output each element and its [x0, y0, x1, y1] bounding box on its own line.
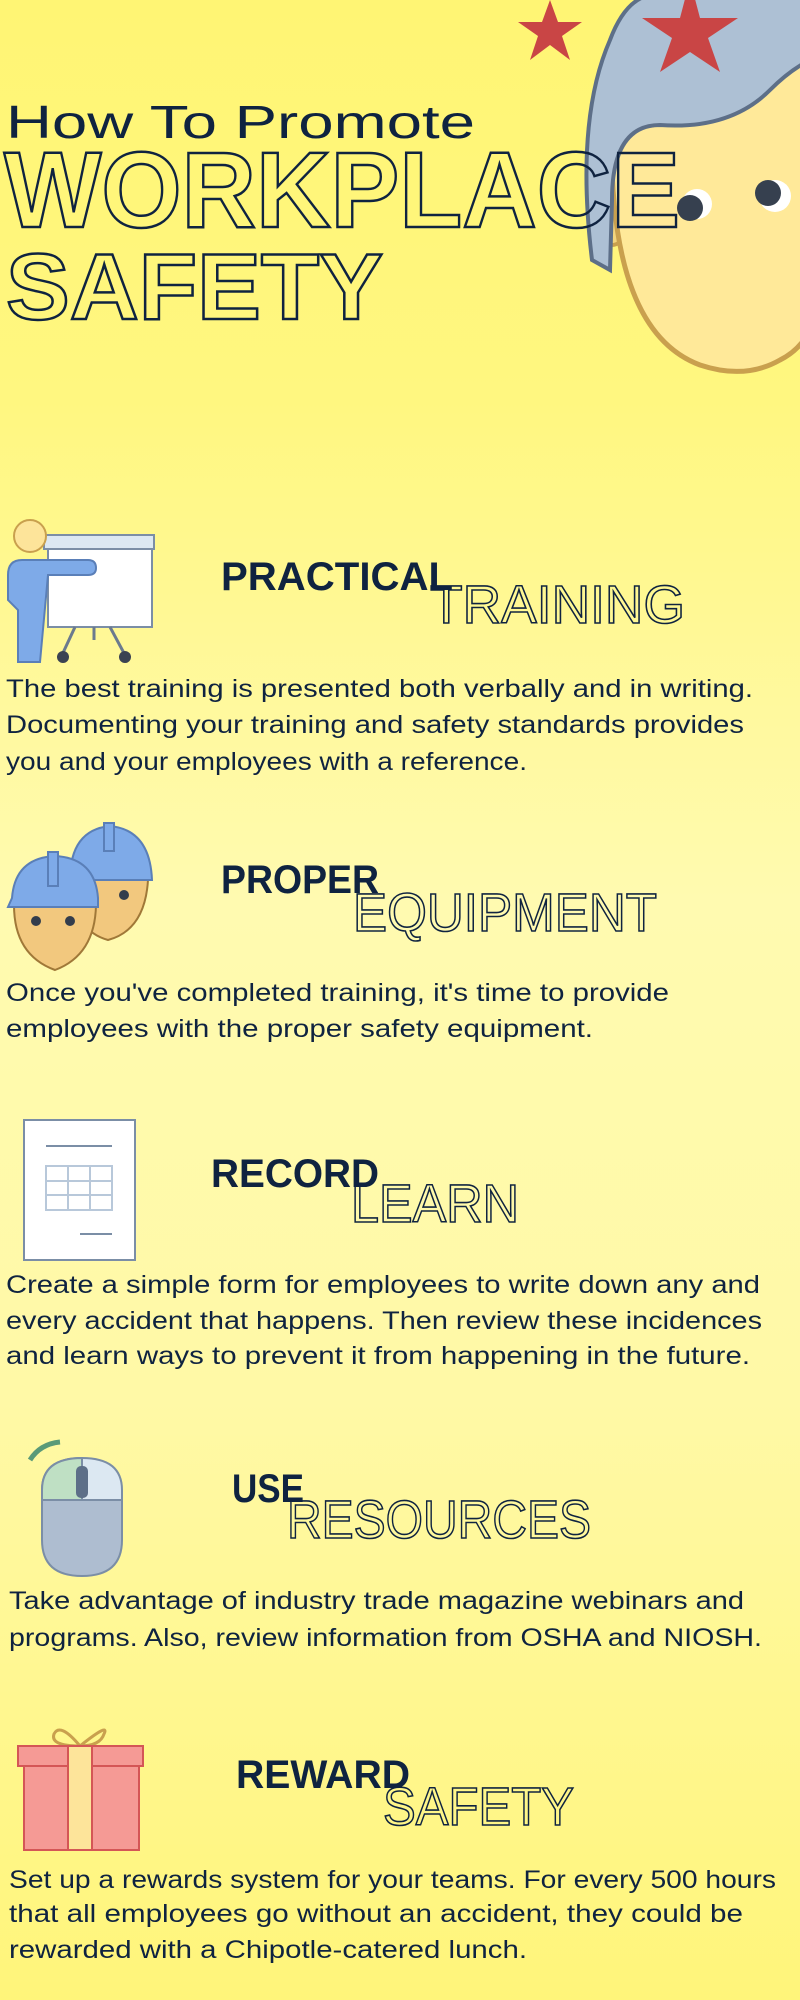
text: programs. Also, review information from OSHA and NIOSH. [9, 1624, 762, 1652]
text [6, 1271, 762, 1370]
title: WORKPLACE [4, 129, 680, 250]
icon: gift box [18, 1730, 143, 1850]
heading: PROPER [221, 858, 379, 902]
title: SAFETY [6, 234, 383, 339]
text: every accident that happens. Then review these incidences [6, 1307, 762, 1335]
icon: form document [24, 1120, 135, 1260]
heading: PRACTICAL [221, 555, 453, 599]
illustration: face with stars [518, 0, 800, 371]
heading: RECORD [211, 1152, 379, 1196]
heading: USE [232, 1467, 304, 1511]
text: Once you've completed training, it's time to provide [6, 979, 669, 1007]
heading [221, 858, 657, 943]
text: Set up a rewards system for your teams. For every 500 hours [9, 1866, 776, 1894]
text: Take advantage of industry trade magazine webinars and [9, 1587, 744, 1615]
section: proper equipment [6, 823, 669, 1043]
icon: workers with hard hats [8, 823, 152, 970]
text [9, 1587, 762, 1652]
heading: EQUIPMENT [353, 883, 657, 943]
title [4, 96, 680, 339]
text: Create a simple form for employees to write down any and [6, 1271, 760, 1299]
section: practical training [6, 520, 753, 776]
heading [221, 555, 685, 635]
text [9, 1866, 776, 1964]
heading [232, 1467, 591, 1550]
text: and learn ways to prevent it from happening in the future. [6, 1342, 750, 1370]
section: use resources [9, 1442, 762, 1652]
heading [236, 1753, 574, 1837]
heading: RESOURCES [287, 1490, 591, 1550]
heading: TRAINING [430, 575, 685, 635]
text: rewarded with a Chipotle-catered lunch. [9, 1936, 527, 1964]
text [6, 979, 669, 1043]
heading: SAFETY [383, 1777, 574, 1837]
heading: REWARD [236, 1753, 410, 1797]
icon: computer mouse [30, 1442, 122, 1576]
heading [211, 1152, 519, 1234]
section: record & learn [6, 1120, 762, 1370]
section: reward safety [9, 1730, 776, 1964]
text: employees with the proper safety equipment. [6, 1015, 593, 1043]
text: The best training is presented both verbally and in writing. [6, 675, 753, 703]
heading: LEARN [351, 1174, 519, 1234]
text [6, 675, 753, 776]
text: Documenting your training and safety standards provides [6, 711, 744, 739]
text: you and your employees with a reference. [6, 748, 527, 776]
icon: presentation easel [8, 520, 154, 663]
title: How To Promote [6, 96, 475, 148]
text: that all employees go without an accident, they could be [9, 1900, 743, 1928]
